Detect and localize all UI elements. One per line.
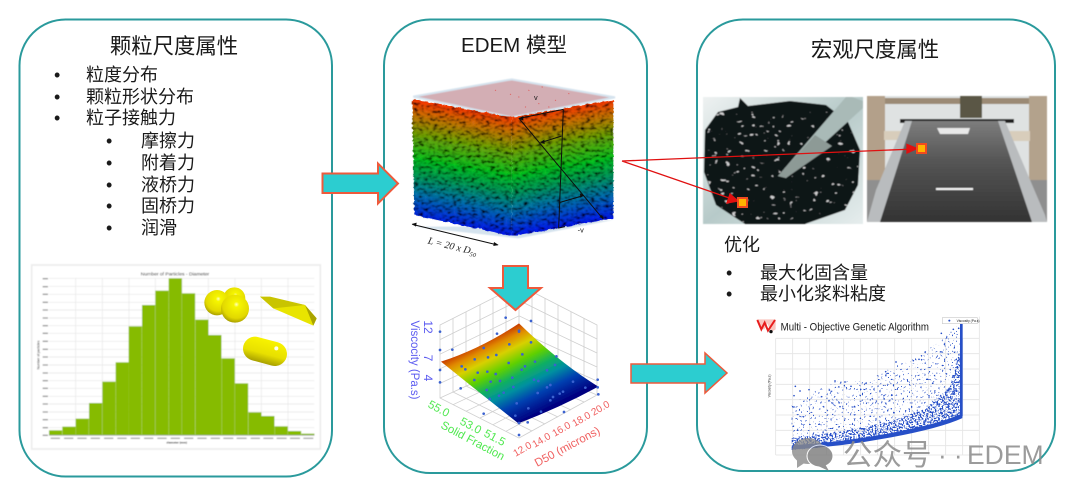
list: particle attributes: • [106,153,112,173]
list: particle attributes: • [54,87,60,107]
list: optimisation goals [726,263,886,304]
list: particle attributes: 摩擦力 [141,131,195,151]
marker: slurry sample [738,198,747,207]
axis labels: solid fraction: 55.0 [426,399,451,420]
list: particle attributes: 液桥力 [141,175,195,195]
heading: particle-scale properties: 颗粒尺度属性 [110,34,238,58]
axis labels: viscosity: 12 [421,320,435,334]
chart: particle diameter histogram: Number of Particles - Diameter [141,272,210,278]
image: particle bed cube under shear [412,79,615,260]
arrow: response surface to optimisation [631,353,727,393]
list: particle attributes [54,65,195,238]
image: particle bed cube under shear: v [534,93,538,102]
list: optimisation goals: 最大化固含量 [760,263,868,283]
chart title: Multi - Objective Genetic Algorithm [781,321,929,333]
axis labels: viscosity: Viscocity (Pa.s) [408,320,420,400]
list: particle attributes: 颗粒形状分布 [86,87,194,107]
image: particle bed cube under shear: 50 [469,251,477,260]
list: optimisation goals: • [726,284,732,304]
heading: optimisation: 优化 [724,235,760,255]
axis labels: solid fraction [426,399,507,463]
axis labels: solid fraction: 53.0 [458,416,483,437]
chart: particle diameter histogram: diameter (mm) [166,441,187,445]
axis label: Viscosity (Pa.s) [768,375,772,397]
axis labels: D50: 16.0 [551,420,573,439]
list: particle attributes: • [106,131,112,151]
icon: yellow particle shapes [204,287,317,369]
list: particle attributes: 润滑 [141,218,177,238]
list: particle attributes: • [106,175,112,195]
list: particle attributes: • [106,218,112,238]
panel: macro-scale properties [622,20,1055,472]
list: optimisation goals: • [726,263,732,283]
list: optimisation goals: 最小化浆料粘度 [760,284,886,304]
axis labels: solid fraction: Solid Fraction [439,420,506,463]
list: particle attributes: 固桥力 [141,196,195,216]
arrow lines: from model to slurry and film [622,144,917,203]
list: particle attributes: 粒度分布 [86,65,158,85]
watermark: · · [938,440,963,470]
panel: EDEM model [384,20,647,473]
logo: red W icon [757,319,776,333]
list: particle attributes: • [106,196,112,216]
axis labels: D50: 12.0 [512,440,534,459]
axis labels: D50: 18.0 [571,410,593,429]
legend [942,318,980,324]
watermark: EDEM [967,440,1044,470]
chart: particle diameter histogram: Number of particles [36,340,40,369]
axis labels: D50 [512,399,612,470]
list: particle attributes: • [54,108,60,128]
image: particle bed cube under shear: -v [578,226,584,235]
list: particle attributes: 粒子接触力 [86,108,176,128]
arrow: particle properties to EDEM model [322,164,398,204]
axis labels: D50: D50 (microns) [533,425,602,470]
image: coated electrode film on coating machine [867,96,1047,222]
axis labels: D50: 14.0 [531,431,553,450]
watermark: 公众号 [843,439,932,472]
marker: film sample [917,144,926,153]
arrow: EDEM model down to response surface [490,266,541,310]
heading: macro-scale properties: 宏观尺度属性 [811,38,939,62]
axis labels: solid fraction: 51.5 [482,428,507,449]
chart: particle diameter histogram [32,265,320,449]
heading: EDEM model: EDEM 模型 [461,34,567,57]
icon: chat bubbles [792,438,833,471]
axis labels: viscosity [408,320,435,400]
legend: Viscosity (Pa.s) [957,319,980,323]
chart: multi-objective genetic algorithm scatter [757,317,980,455]
axis labels: viscosity: 7 [421,355,435,362]
axis labels: D50: 20.0 [590,399,612,418]
image: particle bed cube under shear: L = 20 x D [427,236,472,257]
panel: particle-scale properties [20,20,332,476]
axis labels: viscosity: 4 [421,375,435,382]
grid: 3D axes [440,285,597,438]
chart: viscosity response surface [408,285,612,470]
list: particle attributes: • [54,65,60,85]
image: slurry in mixing pot [703,97,863,224]
watermark [792,438,1044,472]
list: particle attributes: 附着力 [141,153,195,173]
